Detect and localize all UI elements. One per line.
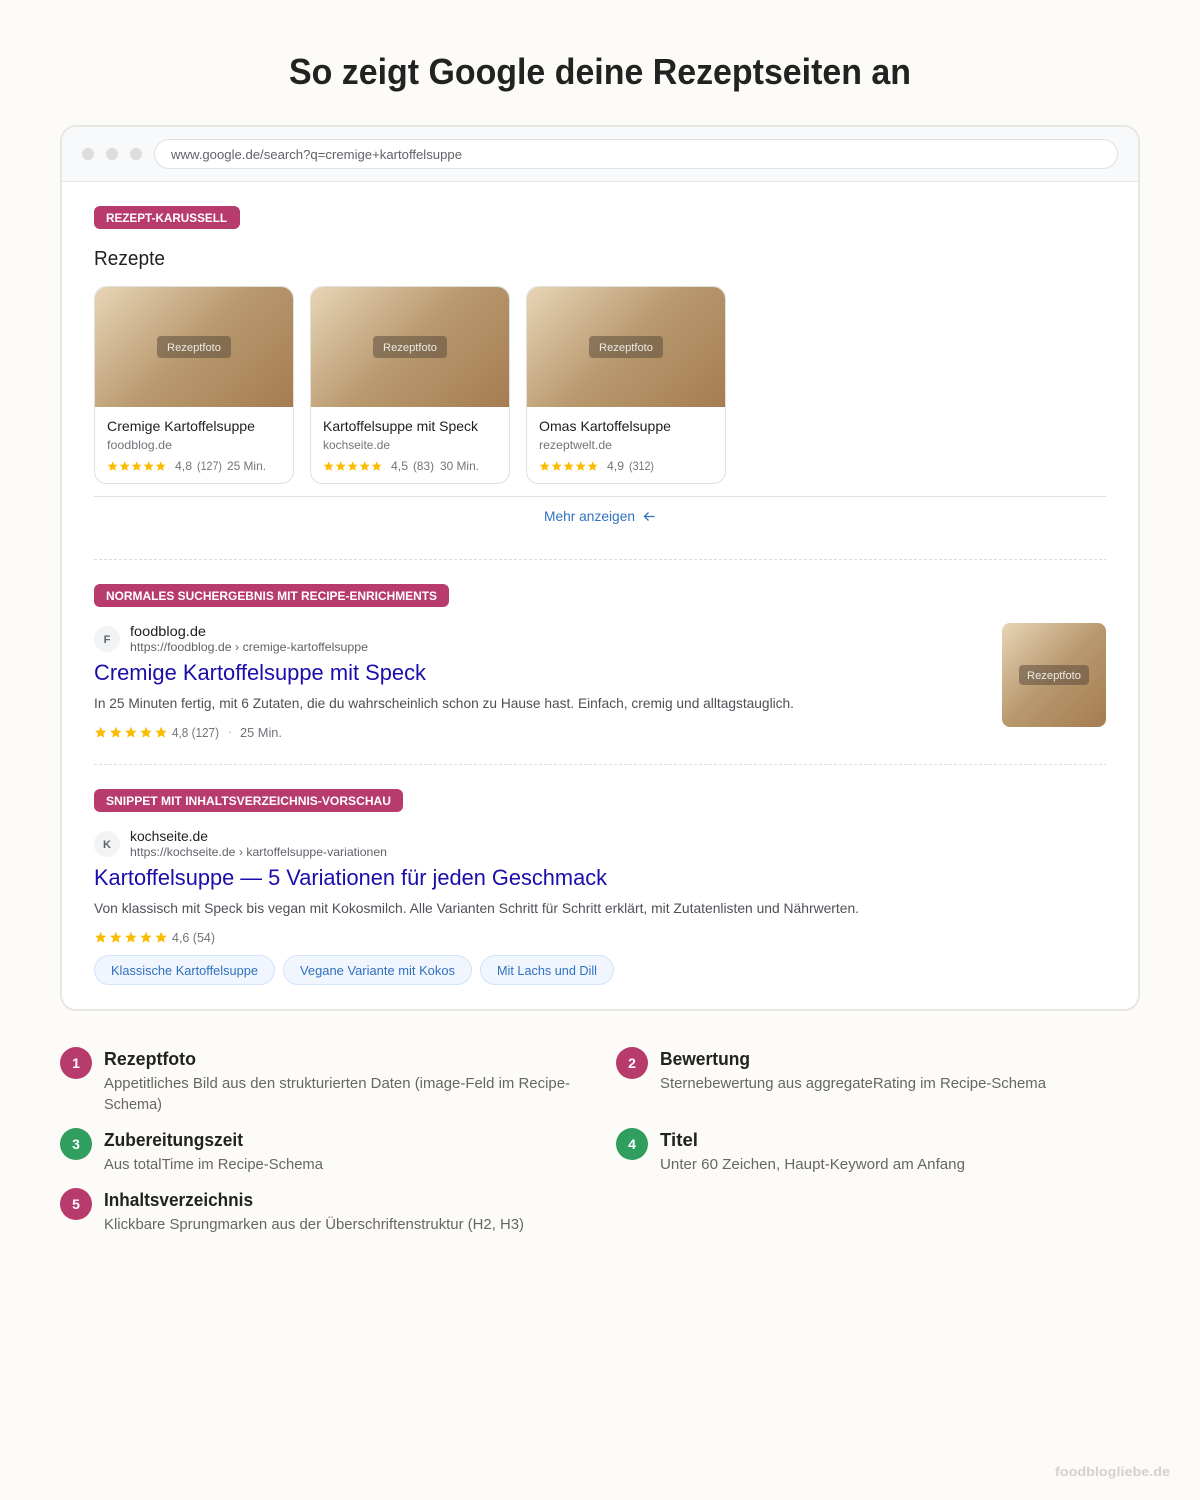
recipe card 2 [310, 286, 510, 484]
footer brand: foodblogliebe.de [1055, 1464, 1170, 1479]
legend item 4: Unter 60 Zeichen, Haupt-Keyword am Anfang [660, 1156, 965, 1173]
recipe card 1: foodblog.de [107, 438, 172, 452]
thumbnail: Rezeptfoto [1027, 670, 1081, 682]
site name and url: https://foodblog.de › cremige-kartoffelsuppe [130, 640, 368, 654]
rating row: 25 Min. [240, 725, 282, 740]
legend item 4 [616, 1128, 965, 1173]
recipe card 2: 4,5 [391, 459, 408, 473]
badge: snippet [94, 789, 403, 812]
site name and url [130, 828, 387, 859]
legend item 1: 1 [72, 1055, 80, 1071]
title: So zeigt Google deine Rezeptseiten an [289, 51, 911, 92]
legend item 2: Sternebewertung aus aggregateRating im Recipe-Schema [660, 1075, 1047, 1092]
rating row: 4,6 (54) [172, 930, 215, 945]
result title: Kartoffelsuppe — 5 Variationen für jeden Geschmack [94, 865, 608, 890]
table of contents chips [94, 956, 614, 984]
result description: Von klassisch mit Speck bis vegan mit Kokosmilch. Alle Varianten Schritt für Schritt erklärt, mit Zutatenlisten und Nährwerten. [94, 900, 859, 916]
section: snippet with table of contents [94, 789, 859, 984]
recipe card 2: (83) [413, 459, 434, 473]
legend item 1: Schema) [104, 1096, 162, 1113]
legend item 1: Rezeptfoto [104, 1049, 196, 1069]
recipe card 1: 25 Min. [227, 459, 266, 473]
favicon F [94, 626, 120, 652]
legend item 2 [616, 1047, 1047, 1092]
legend item 5 [60, 1188, 524, 1233]
thumbnail [1002, 623, 1106, 727]
recipe card 2: kochseite.de [323, 438, 390, 452]
recipe card 1: Cremige Kartoffelsuppe [107, 418, 255, 434]
recipe card 3: rezeptwelt.de [539, 438, 612, 452]
recipe card 3: 4,9 [607, 459, 624, 473]
legend item 3: Aus totalTime im Recipe-Schema [104, 1156, 324, 1173]
badge: Rezept-Karussell: REZEPT-KARUSSELL [106, 211, 227, 225]
section: normal search result [94, 584, 1106, 740]
legend item 1: Appetitliches Bild aus den strukturierten Daten (image-Feld im Recipe- [104, 1075, 570, 1092]
browser toolbar [62, 127, 1138, 182]
recipe card 3: (312) [629, 459, 654, 473]
recipe card 2: Kartoffelsuppe mit Speck [323, 418, 479, 434]
legend item 3 [60, 1128, 324, 1173]
result title: Cremige Kartoffelsuppe mit Speck [94, 660, 427, 685]
site name and url: kochseite.de [130, 828, 208, 844]
recipe card 1: Rezeptfoto [167, 342, 221, 354]
recipe card 3: Omas Kartoffelsuppe [539, 418, 671, 434]
recipe card 1: (127) [197, 459, 222, 473]
recipe card 3: Rezeptfoto [599, 342, 653, 354]
legend [60, 1047, 1047, 1233]
panel: browser window [61, 126, 1139, 1010]
table of contents chips: Vegane Variante mit Kokos [300, 963, 455, 978]
legend item 4: Titel [660, 1130, 698, 1150]
site name and url [130, 623, 368, 654]
legend item 5: Inhaltsverzeichnis [104, 1190, 253, 1210]
link: Mehr anzeigen: Mehr anzeigen [544, 508, 635, 524]
badge: Rezept-Karussell [94, 206, 240, 229]
recipe card 1: 4,8 [175, 459, 192, 473]
legend item 3: 3 [72, 1136, 80, 1152]
legend item 5: 5 [72, 1196, 80, 1212]
section: recipe carousel [94, 206, 1106, 524]
favicon K: K [103, 839, 111, 851]
rating row: 4,8 (127) [172, 725, 219, 740]
recipe card 2: 30 Min. [440, 459, 479, 473]
favicon F: F [104, 634, 111, 646]
table of contents chips: Klassische Kartoffelsuppe [111, 963, 258, 978]
result description: In 25 Minuten fertig, mit 6 Zutaten, die du wahrscheinlich schon zu Hause hast. Einfach, cremig und alltagstauglich. [94, 695, 794, 711]
recipe card 1 [94, 286, 294, 484]
heading: Rezepte: Rezepte [94, 248, 165, 270]
site name and url: https://kochseite.de › kartoffelsuppe-variationen [130, 845, 387, 859]
recipe card 2: Rezeptfoto [383, 342, 437, 354]
favicon K [94, 831, 120, 857]
table of contents chips: Mit Lachs und Dill [497, 963, 597, 978]
badge: snippet: SNIPPET MIT INHALTSVERZEICHNIS-VORSCHAU [106, 794, 391, 808]
recipe card 3 [526, 286, 726, 484]
site name and url: foodblog.de [130, 623, 206, 639]
badge: normal result [94, 584, 449, 607]
legend item 4: 4 [628, 1136, 636, 1152]
browser toolbar: www.google.de/search?q=cremige+kartoffelsuppe [170, 147, 462, 162]
legend item 2: Bewertung [660, 1049, 750, 1069]
legend item 2: 2 [628, 1055, 636, 1071]
legend item 3: Zubereitungszeit [104, 1130, 243, 1150]
legend item 1 [60, 1047, 570, 1113]
rating row [95, 930, 215, 945]
badge: normal result: NORMALES SUCHERGEBNIS MIT RECIPE-ENRICHMENTS [106, 589, 437, 603]
rating row [95, 725, 282, 740]
legend item 5: Klickbare Sprungmarken aus der Überschriftenstruktur (H2, H3) [104, 1215, 524, 1233]
